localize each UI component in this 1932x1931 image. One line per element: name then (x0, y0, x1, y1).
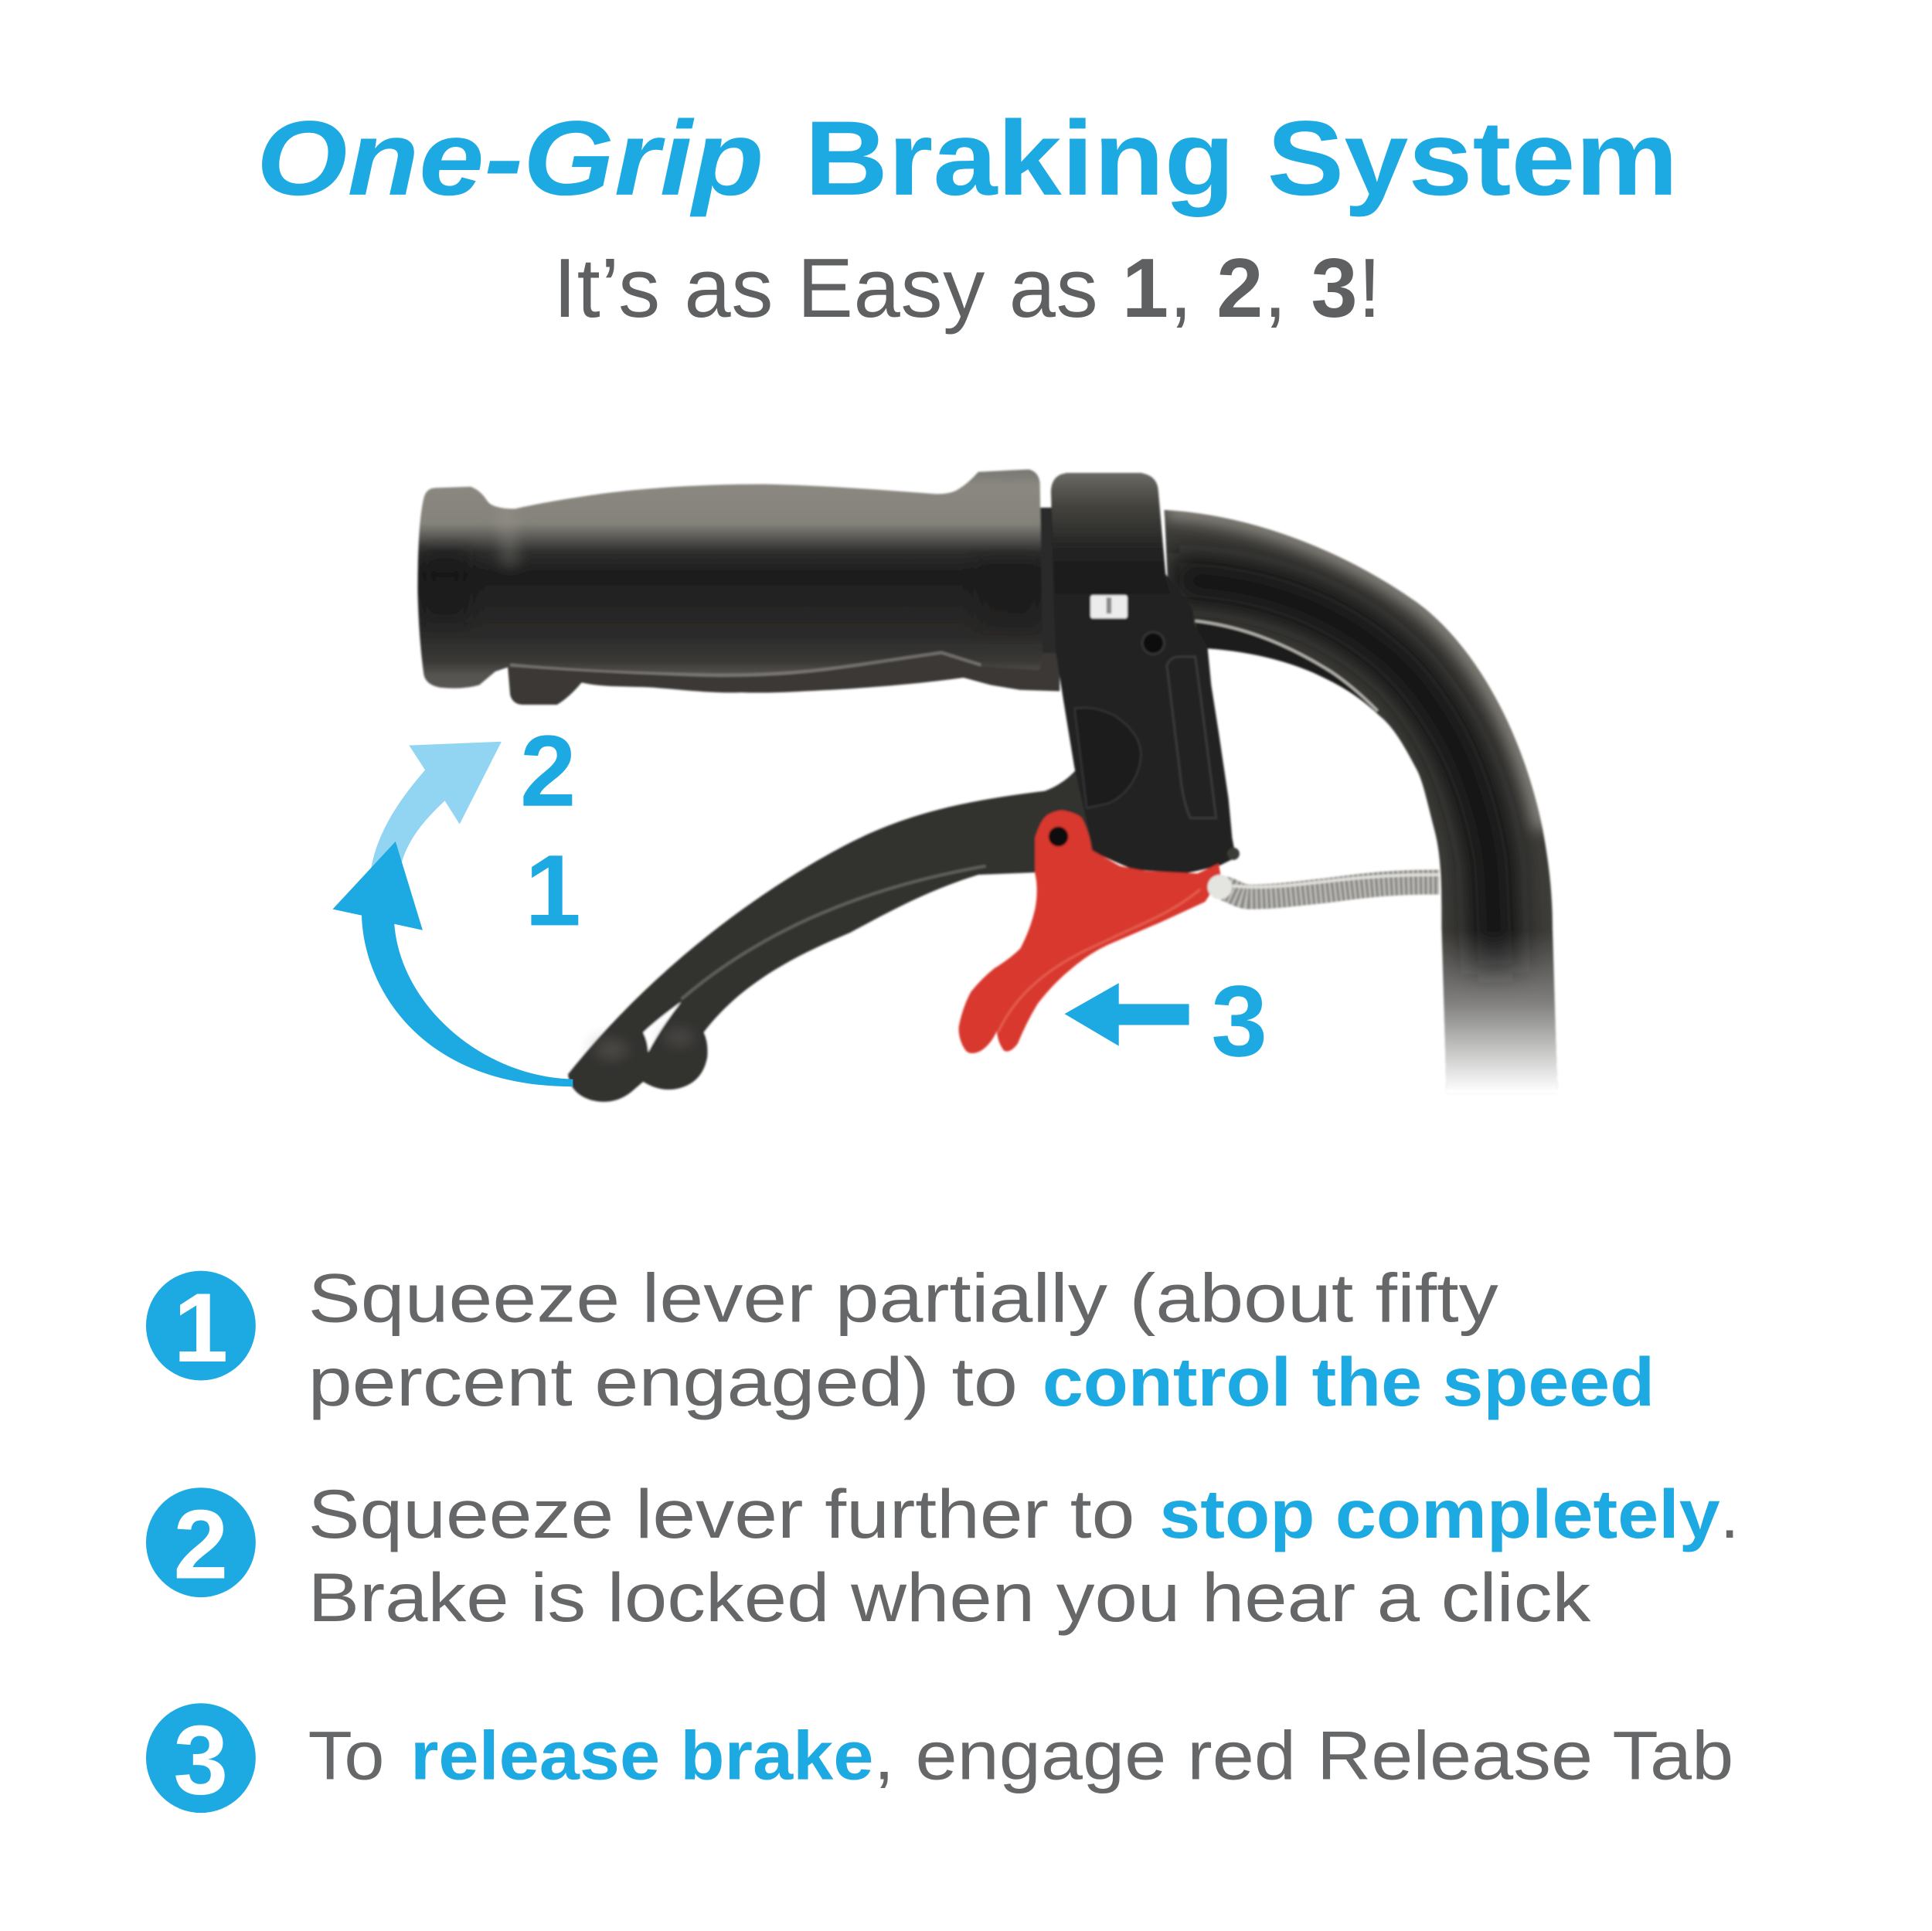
step 2: Brake is locked when you hear a click (308, 1559, 1591, 1636)
bracket top cap (1051, 473, 1165, 563)
cable ferrule (1207, 848, 1240, 899)
curved tube (1162, 508, 1558, 1088)
arrow 3 (1065, 983, 1189, 1046)
step 2: 2 (173, 1490, 228, 1600)
bolt (1090, 595, 1128, 618)
housing highlight (1196, 621, 1378, 711)
lever highlight line (682, 866, 986, 999)
cable spring (1223, 875, 1439, 897)
handlebar illustration (406, 462, 1577, 1109)
diagram number 2: 2 (520, 715, 577, 828)
brake lever (568, 769, 1099, 1102)
step 2: stop completely (1159, 1475, 1720, 1552)
ball tips shading (594, 1028, 695, 1059)
red release tab (958, 811, 1221, 1053)
bracket band (1053, 562, 1171, 593)
step 3: , engage red Release Tab (873, 1716, 1733, 1793)
bracket channel (1167, 657, 1216, 818)
step 1: Squeeze lever partially (about fifty (308, 1260, 1498, 1337)
step 1 (146, 1260, 1655, 1420)
tube piece behind grip gap (1037, 508, 1057, 655)
arrow 2 (light) (371, 742, 502, 870)
step 3: release brake (410, 1716, 873, 1793)
step 3: 3 (173, 1705, 228, 1815)
arrow 1 (332, 841, 573, 1086)
lever fork gap (643, 1001, 682, 1052)
subtitle: It’s as Easy as 1, 2, 3! (553, 241, 1381, 335)
step 1: percent engaged) to (308, 1343, 1018, 1420)
bracket raised panel (1074, 708, 1141, 808)
step 2: . (1720, 1475, 1740, 1552)
tab screw (1049, 827, 1068, 846)
step 3 (146, 1703, 1733, 1815)
step 2: Squeeze lever further to (308, 1475, 1134, 1552)
brake bracket (1051, 473, 1236, 873)
step 1: control the speed (1043, 1343, 1655, 1420)
step 2 (146, 1475, 1740, 1636)
lever under grip (508, 653, 1060, 705)
screw (1142, 632, 1165, 654)
tab ridge (998, 889, 1200, 1032)
title: Braking System (804, 100, 1679, 218)
diagram number 1: 1 (525, 834, 581, 947)
step 3: To (308, 1716, 384, 1793)
title (257, 100, 1679, 218)
grip (406, 462, 1053, 696)
diagram number 3: 3 (1211, 964, 1267, 1077)
step 1: 1 (173, 1273, 228, 1383)
cable housing (1196, 621, 1383, 719)
title: One-Grip (257, 100, 764, 218)
